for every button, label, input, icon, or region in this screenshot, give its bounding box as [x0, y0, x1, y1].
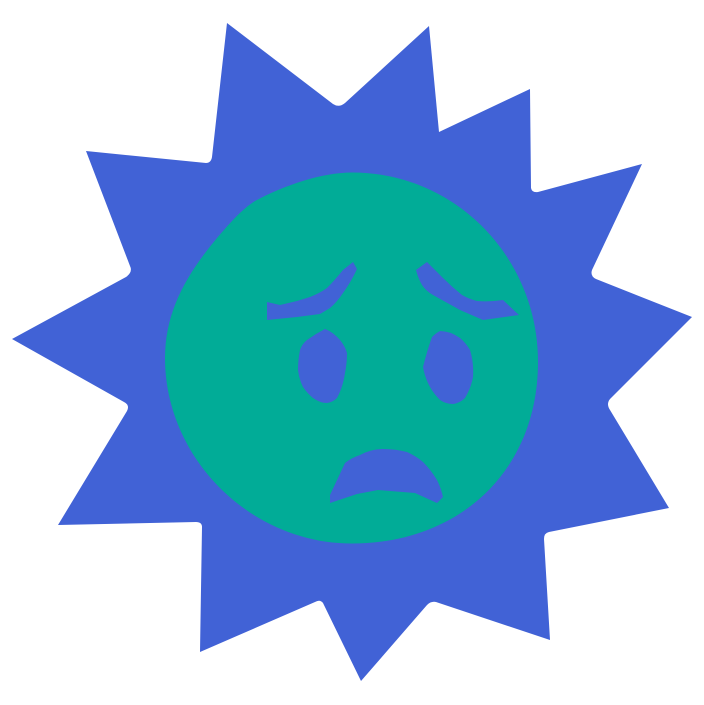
- right eye: [423, 331, 473, 404]
- left eye: [298, 329, 347, 403]
- icon: green worried face: [165, 172, 538, 544]
- right eyebrow: [416, 262, 519, 320]
- frowning mouth: [330, 449, 443, 503]
- left eyebrow: [267, 262, 357, 320]
- face disc: [165, 172, 538, 544]
